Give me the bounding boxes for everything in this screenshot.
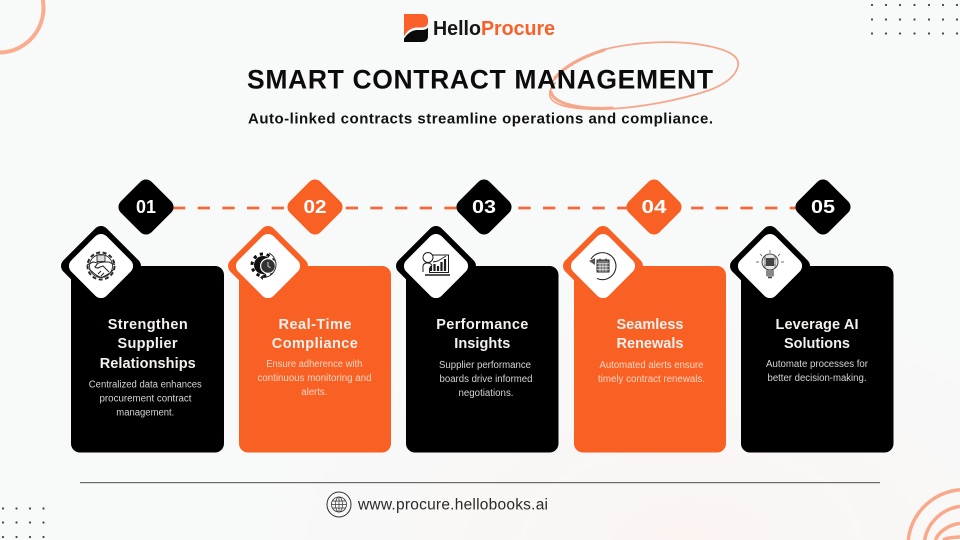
card title (436, 317, 528, 352)
concentric arcs bottom right (908, 490, 960, 540)
card title: Supplier (118, 336, 178, 352)
icon: AI lightbulb (756, 250, 784, 278)
card title: Strengthen (108, 317, 188, 333)
card title: Performance (436, 317, 528, 333)
panel: real-time compliance (225, 223, 391, 452)
panel: leverage ai solutions (727, 223, 894, 452)
card title: Solutions (784, 336, 850, 352)
title: SMART CONTRACT MANAGEMENT (247, 64, 713, 94)
card title (776, 317, 858, 352)
icon: gear clock (252, 253, 276, 280)
logo wordmark Hello: Hello (433, 18, 481, 40)
subtitle: Auto-linked contracts streamline operations and compliance. (248, 110, 713, 127)
card body: management. (116, 407, 174, 418)
footer website (327, 492, 548, 517)
step badge 01: 01 (136, 197, 156, 217)
card title: Leverage AI (776, 317, 858, 333)
step badge 05: 05 (811, 197, 835, 217)
card body (598, 360, 705, 385)
website url: www.procure.hellobooks.ai (357, 496, 548, 513)
card body: Centralized data enhances (89, 379, 202, 390)
card body (439, 360, 532, 399)
logo wordmark Procure: Procure (481, 18, 555, 40)
icon: gear handshake (87, 252, 115, 280)
card title: Compliance (272, 336, 358, 352)
card title: Seamless (616, 317, 684, 333)
card title: Insights (454, 336, 510, 352)
dashed timeline connector (173, 207, 800, 209)
step badge 02: 02 (304, 197, 326, 217)
card body: continuous monitoring and (258, 373, 372, 384)
card title (616, 317, 684, 352)
card body: boards drive informed (440, 374, 532, 385)
step badge 03: 03 (472, 197, 496, 217)
card body (258, 359, 372, 398)
step badge 02 (284, 176, 346, 238)
icon: presenter with chart (423, 252, 450, 275)
panel: seamless renewals (560, 223, 726, 452)
card body: better decision-making. (768, 373, 866, 384)
footer divider (80, 482, 880, 483)
card body: Automated alerts ensure (600, 360, 704, 371)
card title: Relationships (100, 356, 196, 372)
card body: alerts. (301, 387, 327, 398)
card body: Supplier performance (439, 360, 531, 371)
logo mark (404, 14, 428, 42)
icon: calendar renewal (589, 253, 616, 280)
dot grid top right (871, 4, 958, 35)
card title (100, 317, 196, 372)
card body (89, 379, 202, 418)
card title: Real-Time (278, 317, 352, 333)
step badge 03 (453, 176, 515, 238)
dot grid bottom left (2, 507, 45, 538)
panel: performance insights (393, 223, 558, 452)
card title (272, 317, 358, 352)
hand drawn ellipse highlight (550, 42, 738, 109)
step badge 05 (792, 176, 854, 238)
card title: Renewals (616, 336, 684, 352)
card body: timely contract renewals. (598, 374, 705, 385)
card body: Ensure adherence with (266, 359, 362, 370)
logo (404, 14, 555, 42)
card body (766, 359, 869, 384)
icon: globe (327, 492, 351, 517)
step badge 04 (623, 176, 685, 238)
step badge 01 (115, 176, 177, 238)
card body: Automate processes for (766, 359, 869, 370)
step badge 04: 04 (642, 197, 666, 217)
panel: strengthen supplier relationships (58, 223, 224, 452)
decorative corner ring top left (0, 0, 44, 52)
card body: negotiations. (458, 388, 514, 399)
card body: procurement contract (100, 393, 192, 404)
